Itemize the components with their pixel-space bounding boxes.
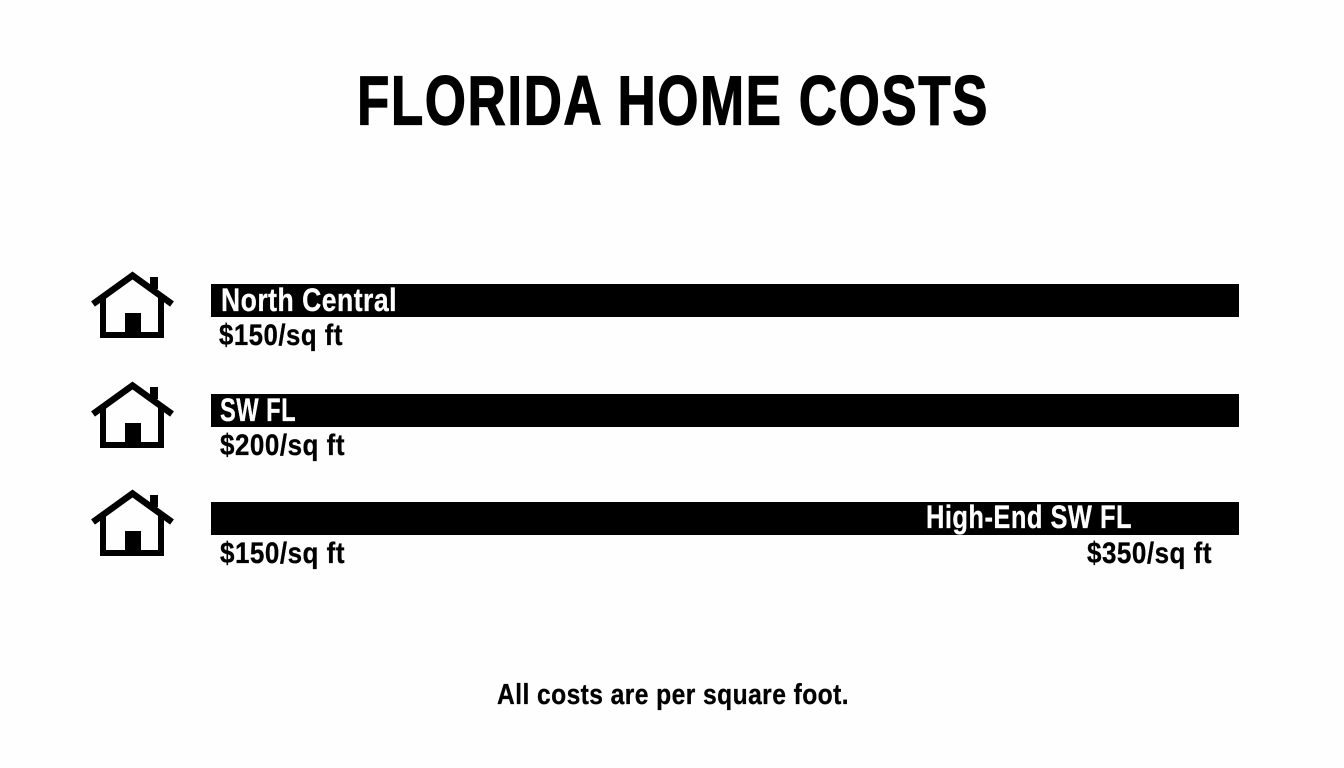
bar label: North Central: North Central xyxy=(221,282,397,318)
icon: house xyxy=(93,276,172,337)
cost: low end $150/sq ft: $150/sq ft xyxy=(220,537,345,570)
icon: house xyxy=(93,386,172,447)
row: High-End SW FL xyxy=(93,494,1239,570)
footnote: All costs are per square foot. xyxy=(497,679,849,711)
title: FLORIDA HOME COSTS xyxy=(357,62,989,140)
bar label: High-End SW FL: High-End SW FL xyxy=(926,499,1132,535)
bar: High-End SW FL xyxy=(211,502,1239,535)
row: SW FL xyxy=(93,386,1239,462)
cost: $150/sq ft: $150/sq ft xyxy=(219,319,343,352)
cost: high end $350/sq ft: $350/sq ft xyxy=(1087,537,1212,570)
cost: $200/sq ft: $200/sq ft xyxy=(220,429,345,462)
bar: North Central xyxy=(211,284,1239,317)
bar label: SW FL: SW FL xyxy=(220,392,296,428)
bar: SW FL xyxy=(211,394,1239,427)
row: North Central xyxy=(93,276,1239,352)
icon: house xyxy=(93,494,172,555)
